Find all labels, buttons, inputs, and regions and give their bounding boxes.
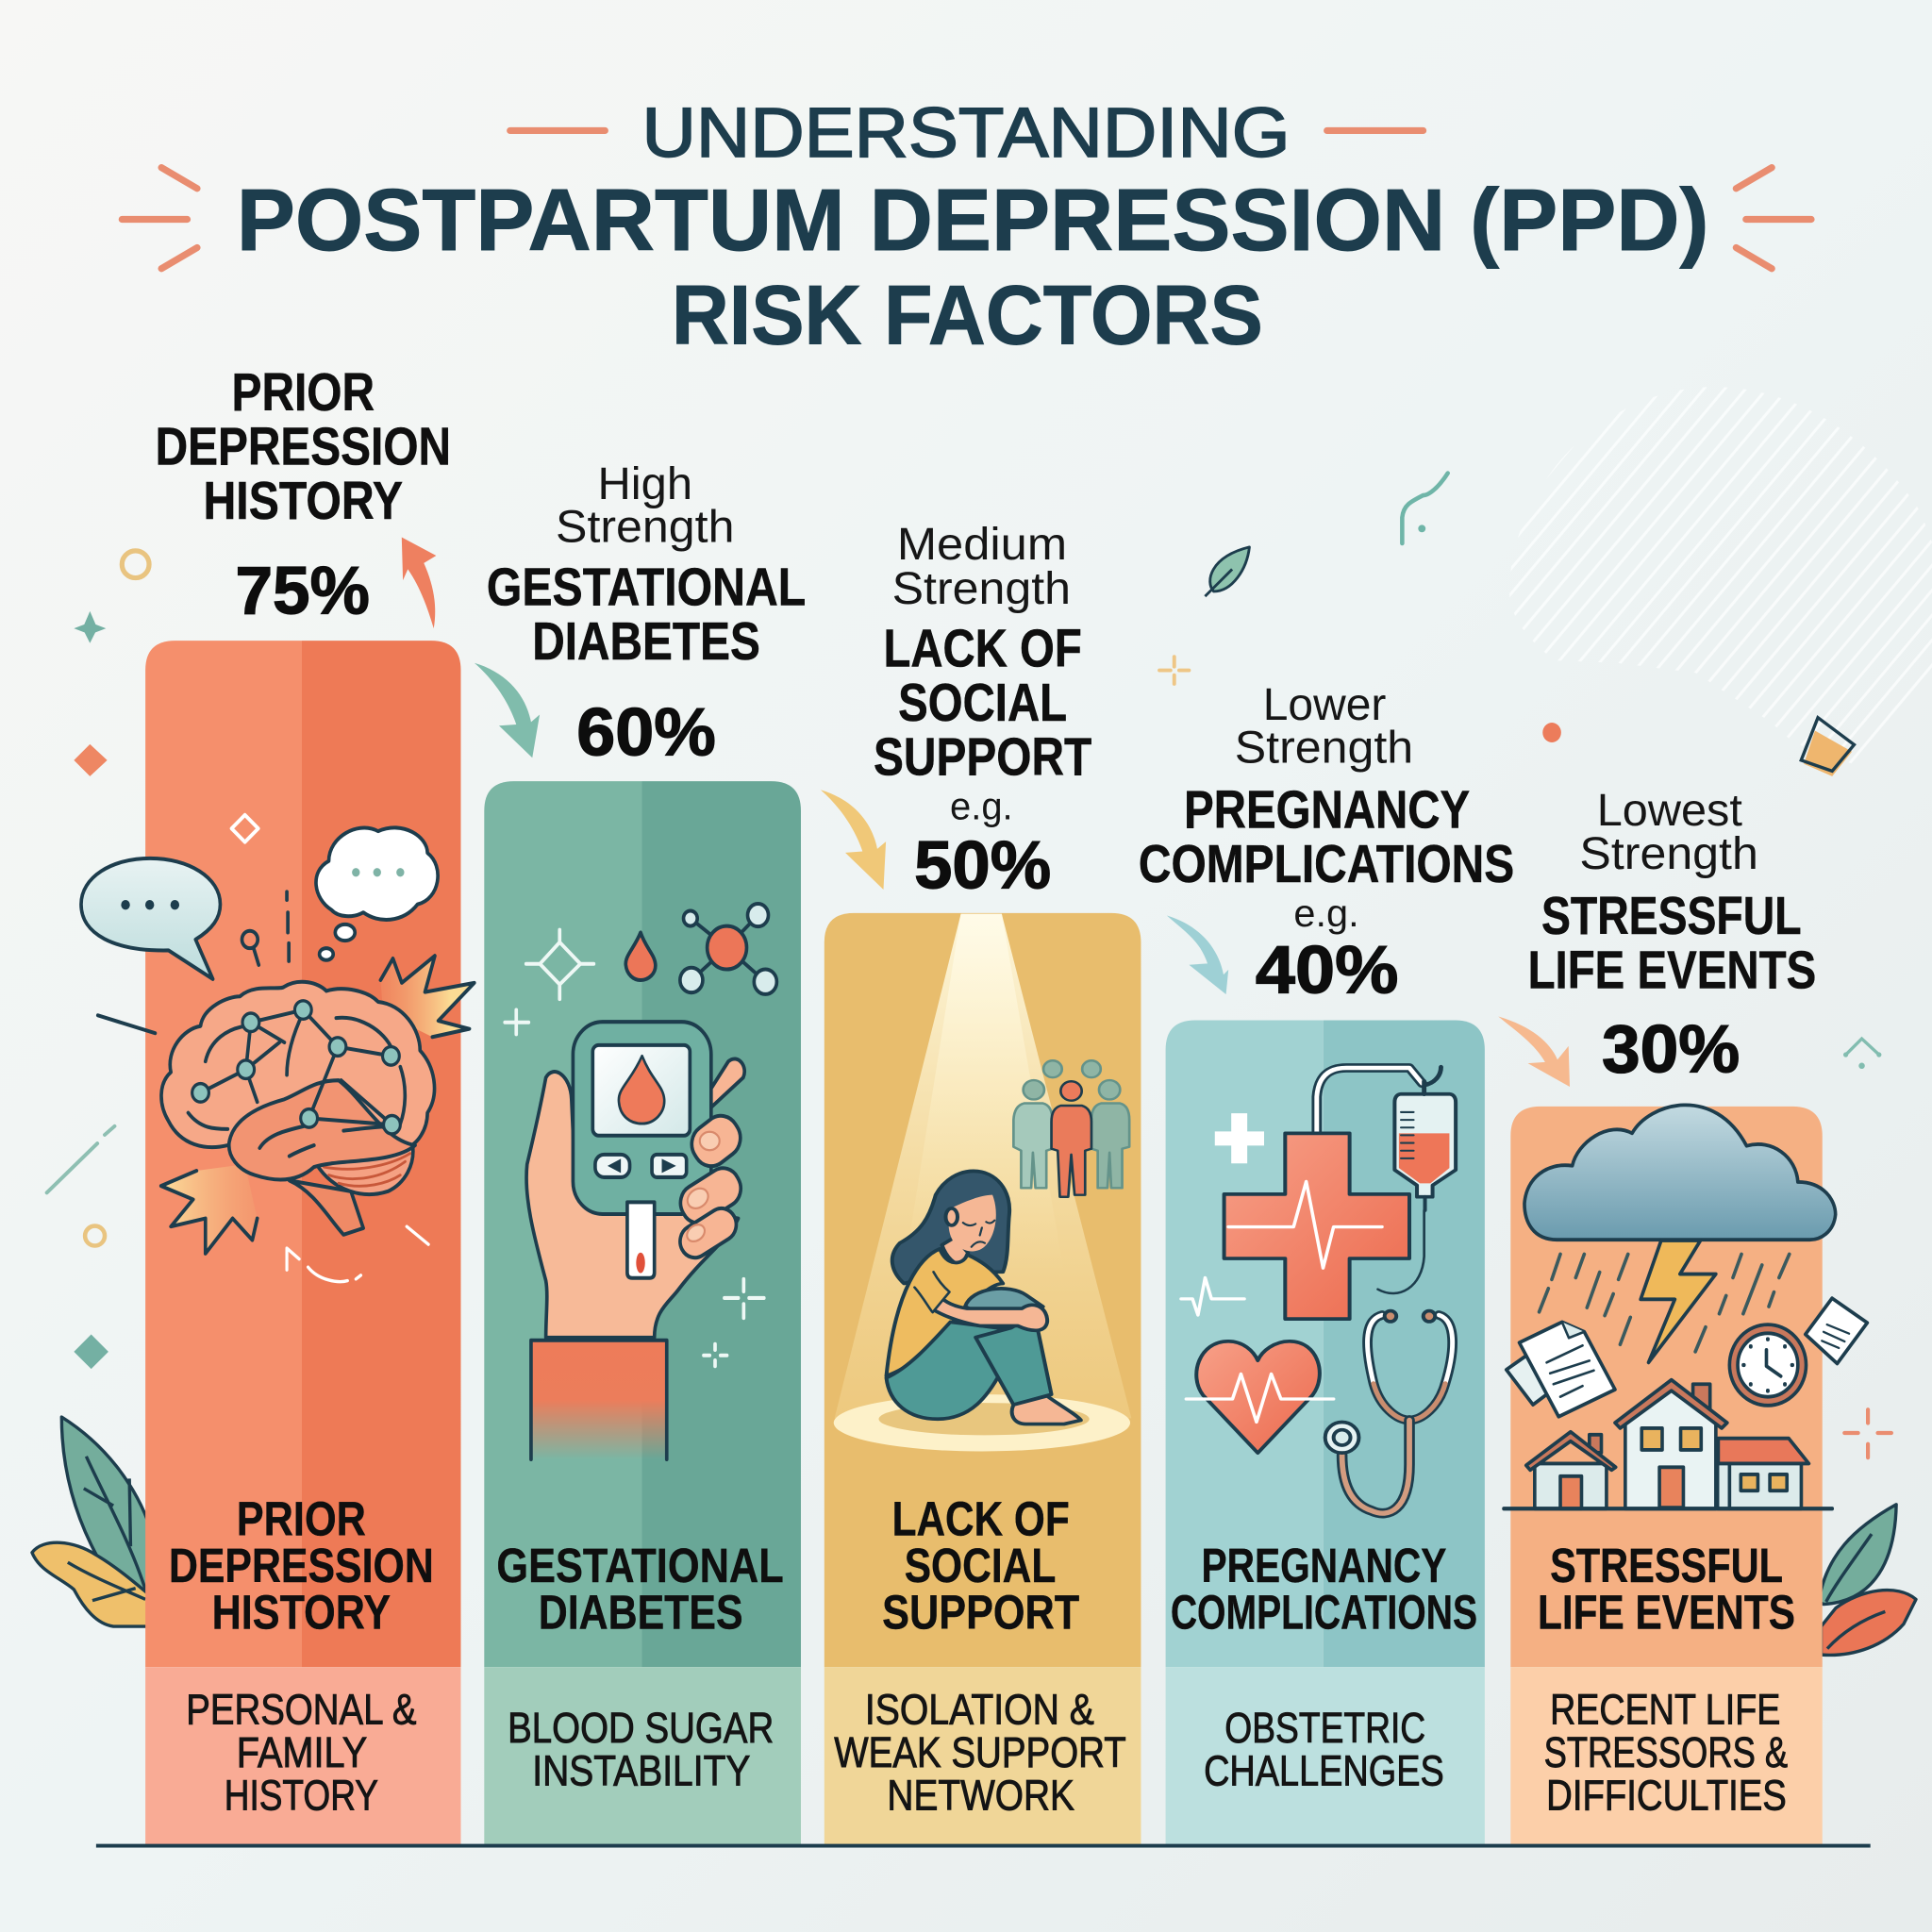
description: obstetric challenges: OBSTETRIC: [1224, 1704, 1425, 1752]
bar label: prior depression history: DEPRESSION: [169, 1539, 434, 1592]
heading: prior depression history with 75%: PRIOR: [232, 362, 375, 422]
description: personal and family history: PERSONAL &: [186, 1685, 416, 1733]
title accent rays: [122, 130, 1811, 269]
icon: spotlight floor ellipse: [834, 1394, 1130, 1452]
heading: prior depression history with 75%: [156, 362, 451, 628]
icon: molecule: [680, 904, 776, 994]
icon: teal star: [74, 611, 106, 643]
icon: big house: [1615, 1380, 1727, 1508]
arrow: to 60%: [475, 663, 540, 758]
description: personal and family history: HISTORY: [225, 1772, 378, 1820]
bar label: pregnancy complications: COMPLICATIONS: [1171, 1586, 1477, 1640]
icon: speech bubble: [81, 858, 220, 979]
heading: lack of social support with 50%: Medium: [897, 519, 1067, 570]
icon: stethoscope: [1325, 1311, 1453, 1513]
title block: RISK FACTORS: [672, 268, 1263, 361]
icon: lightning bolt: [1641, 1241, 1716, 1362]
icon: white sparkles: [505, 930, 764, 1366]
icon: yellow plus: [1159, 657, 1189, 684]
heading: gestational diabetes with 60%: GESTATIONAL: [487, 557, 806, 616]
description: blood sugar instability: INSTABILITY: [532, 1747, 750, 1795]
icon: teal node cap: [1844, 1039, 1881, 1068]
icon: pin and dashes: [242, 891, 289, 965]
bar label: pregnancy complications: PREGNANCY: [1201, 1539, 1446, 1592]
decorative striped circle: [1509, 387, 1932, 763]
heading: prior depression history with 75%: HISTORY: [204, 471, 403, 530]
illustration: isolated woman in spotlight: [834, 914, 1131, 1452]
heading: gestational diabetes with 60%: 60%: [576, 695, 716, 771]
panel: stressful life events bar: [1510, 1107, 1823, 1844]
icon: medical cross: [1224, 1133, 1409, 1319]
heading: stressful life events with 30%: 30%: [1602, 1011, 1740, 1087]
description: isolation and weak support network: ISOLATION &: [865, 1685, 1094, 1733]
icon: clock: [1729, 1324, 1807, 1406]
heading: prior depression history with 75%: DEPRESSION: [156, 416, 451, 475]
arrow: up to 75%: [402, 537, 436, 628]
heading: lack of social support with 50%: LACK OF: [883, 619, 1082, 678]
heading: stressful life events with 30%: LIFE EVENTS: [1528, 941, 1816, 1000]
icon: hand: [526, 1072, 739, 1338]
illustration: medical cross, IV bag, heart and stethoscope: [1181, 1067, 1456, 1513]
title block: POSTPARTUM DEPRESSION (PPD): [237, 171, 1709, 269]
bar label: prior depression history: HISTORY: [212, 1586, 391, 1640]
icon: rain: [1540, 1254, 1790, 1352]
icon: small leaf: [1205, 547, 1249, 596]
illustration: storm over houses: [1504, 1105, 1867, 1508]
icon: IV bag: [1378, 1067, 1456, 1293]
icon: teal dot: [1418, 525, 1425, 532]
description: isolation and weak support network: [834, 1685, 1126, 1820]
icon: heart: [1186, 1341, 1334, 1453]
icon: sleeve cuff: [531, 1341, 668, 1459]
heading: gestational diabetes with 60%: Strength: [556, 502, 734, 553]
icon: orange cross spark: [1844, 1409, 1891, 1457]
description: recent life stressors and difficulties: [1544, 1685, 1788, 1820]
leaves left: [32, 1417, 150, 1626]
heading: pregnancy complications with 40%: 40%: [1256, 933, 1398, 1008]
bar label: lack of social support: LACK OF: [892, 1491, 1070, 1545]
heading: stressful life events with 30%: Lowest: [1597, 785, 1742, 836]
icon: IV tube: [1317, 1068, 1422, 1133]
title block: [237, 93, 1709, 361]
icon: teal dashed line: [47, 1126, 114, 1192]
heading: pregnancy complications with 40%: Strength: [1235, 722, 1413, 773]
icon: dark motion line: [98, 1015, 155, 1033]
illustration: brain and thought bubbles: [81, 815, 475, 1282]
bar label: stressful life events: [1538, 1539, 1795, 1640]
bar label: lack of social support: SOCIAL: [905, 1539, 1056, 1592]
heading: pregnancy complications with 40%: PREGNANCY: [1184, 780, 1470, 840]
heading: gestational diabetes with 60%: High: [597, 458, 692, 509]
icon: ground line: [1504, 1504, 1832, 1514]
icon: white diamond: [231, 815, 258, 842]
panel: pregnancy complications bar: [1166, 1020, 1485, 1844]
icon: blood drop: [625, 932, 656, 980]
bar label: prior depression history: [169, 1491, 434, 1640]
arrow: to 50%: [821, 790, 886, 890]
icon: starbursts: [161, 956, 475, 1254]
heading: pregnancy complications with 40%: [1139, 679, 1514, 1008]
icon: brain: [161, 982, 435, 1235]
bar label: gestational diabetes: [496, 1539, 784, 1640]
icon: glucose meter: [573, 1022, 711, 1278]
heading: pregnancy complications with 40%: e.g.: [1293, 891, 1359, 935]
icon: group of people: [1013, 1060, 1129, 1197]
chart baseline: [96, 1844, 1871, 1848]
icon: orange dot: [1542, 723, 1561, 742]
title block: UNDERSTANDING: [641, 93, 1291, 172]
heading: pregnancy complications with 40%: COMPLICATIONS: [1139, 834, 1514, 893]
heading: gestational diabetes with 60%: DIABETES: [532, 611, 760, 671]
description: obstetric challenges: CHALLENGES: [1204, 1747, 1444, 1795]
icon: woman: [887, 1171, 1081, 1424]
bar label: stressful life events: STRESSFUL: [1550, 1539, 1783, 1592]
icon: white plus: [1215, 1113, 1264, 1163]
description: blood sugar instability: [508, 1704, 774, 1795]
description: recent life stressors and difficulties: DIFFICULTIES: [1546, 1772, 1787, 1820]
arrow: to 30%: [1498, 1017, 1570, 1087]
illustration: glucose meter in hand: [505, 904, 776, 1459]
bar label: prior depression history: PRIOR: [237, 1491, 366, 1545]
bar label: lack of social support: [882, 1491, 1079, 1640]
heading: gestational diabetes with 60%: [487, 458, 806, 771]
bar label: gestational diabetes: DIABETES: [539, 1586, 743, 1640]
icon: flying note: [1806, 1298, 1867, 1363]
bar label: stressful life events: LIFE EVENTS: [1538, 1586, 1795, 1640]
heading: pregnancy complications with 40%: Lower: [1263, 679, 1386, 730]
icon: white motion marks: [287, 1226, 428, 1282]
icon: teal squiggle: [1402, 474, 1448, 543]
decorative icons right: [1159, 474, 1891, 1457]
heading: lack of social support with 50%: 50%: [914, 828, 1051, 904]
icon: storm cloud: [1524, 1105, 1836, 1240]
panel: gestational diabetes bar: [484, 781, 801, 1844]
description: isolation and weak support network: WEAK SUPPORT: [834, 1728, 1126, 1776]
icon: light beam: [835, 914, 1131, 1418]
heading: stressful life events with 30%: [1528, 785, 1816, 1087]
bar label: gestational diabetes: GESTATIONAL: [496, 1539, 784, 1592]
heading: lack of social support with 50%: e.g.: [950, 785, 1013, 828]
description: blood sugar instability: BLOOD SUGAR: [508, 1704, 774, 1752]
icon: yellow ring top: [122, 551, 149, 578]
arrow: to 40%: [1167, 915, 1228, 994]
heading: prior depression history with 75%: 75%: [235, 553, 370, 628]
icon: thought cloud: [316, 827, 438, 960]
description: recent life stressors and difficulties: RECENT LIFE: [1550, 1685, 1780, 1733]
icon: small house: [1526, 1432, 1616, 1508]
heading: lack of social support with 50%: SUPPORT: [874, 727, 1091, 787]
description: recent life stressors and difficulties: STRESSORS &: [1544, 1728, 1788, 1776]
icon: small pulse line: [1181, 1277, 1244, 1315]
leaves right: [1819, 1505, 1916, 1655]
heading: stressful life events with 30%: STRESSFUL: [1541, 886, 1802, 945]
panel: prior depression history bar: [145, 641, 460, 1844]
panel: lack of social support bar: [824, 913, 1141, 1844]
description: personal and family history: FAMILY: [237, 1728, 367, 1776]
heading: lack of social support with 50%: Strength: [892, 563, 1071, 614]
bar label: lack of social support: SUPPORT: [882, 1586, 1079, 1640]
bar label: pregnancy complications: [1171, 1539, 1477, 1640]
heading: stressful life events with 30%: Strength: [1579, 828, 1758, 879]
icon: yellow ring bottom: [85, 1226, 105, 1245]
icon: papers: [1507, 1322, 1615, 1417]
icon: teal diamond: [74, 1335, 108, 1369]
icon: orange diamond: [74, 744, 108, 776]
decorative icons left: [47, 551, 149, 1369]
heading: lack of social support with 50%: SOCIAL: [898, 673, 1067, 732]
icon: right house: [1718, 1439, 1808, 1508]
icon: fingers: [675, 1058, 747, 1263]
heading: lack of social support with 50%: [874, 519, 1091, 904]
icon: tilted box: [1801, 718, 1854, 776]
description: isolation and weak support network: NETWORK: [887, 1772, 1074, 1820]
description: personal and family history: [186, 1685, 416, 1820]
description: obstetric challenges: [1204, 1704, 1444, 1795]
